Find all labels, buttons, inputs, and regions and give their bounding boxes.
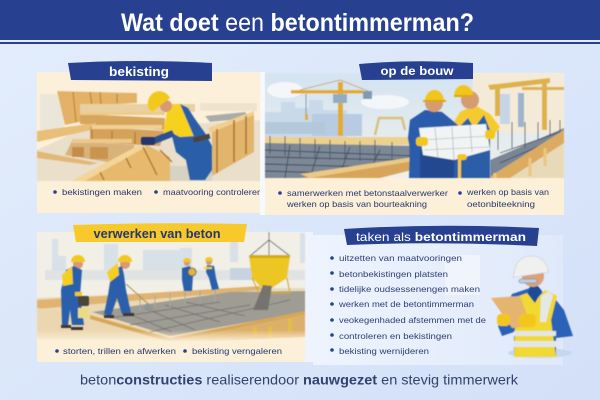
panel: taken als betontimmerman — [313, 226, 573, 365]
title: Wat doet een betontimmerman? — [121, 9, 474, 37]
banner: taken als betontimmerman: taken als betontimmerman — [356, 230, 526, 244]
banner: verwerken van beton: verwerken van beton — [94, 227, 220, 241]
illustration: building site with crane and rebar — [265, 73, 564, 178]
text: beton tasks: bekisting verngaleren — [192, 346, 282, 356]
icon: concrete workers — [61, 255, 219, 330]
list: tasks: betonbekistingen platsten — [339, 269, 448, 279]
illustration: worker building formwork — [37, 72, 260, 181]
list: tasks: werken met de betontimmerman — [338, 299, 474, 309]
list: tasks — [330, 253, 486, 356]
banner: op de bouw — [359, 61, 473, 80]
text: op de bouw tasks: werken op basis van bourteakning — [286, 199, 427, 209]
panel: op de bouw — [265, 61, 564, 215]
gantry crane — [488, 78, 564, 130]
banner: op de bouw: op de bouw — [380, 64, 454, 78]
icon: inspector with clipboard — [491, 256, 573, 358]
text: bekisting tasks: bekistingen maken — [62, 187, 142, 197]
text: op de bouw tasks — [278, 187, 549, 209]
panel: verwerken van beton — [37, 223, 313, 362]
banner: bekisting — [68, 61, 212, 81]
footer tagline: betonconstructies realiserendoor nauwgezet en stevig timmerwerk — [80, 372, 519, 388]
crane — [291, 80, 372, 136]
list: tasks: tidelijke oudsessenengen maken — [339, 284, 480, 294]
icon: concrete bucket — [249, 232, 290, 310]
text: op de bouw tasks: werken op basis van — [466, 187, 549, 197]
text: bekisting tasks — [53, 187, 260, 197]
list: tasks: veokegenhaded afstemmen met de — [339, 315, 486, 325]
text: bekisting tasks: maatvooring controlerer — [163, 187, 260, 197]
text: beton tasks — [55, 346, 282, 356]
icon: two workers reading plan — [408, 85, 500, 178]
banner: bekisting: bekisting — [109, 65, 169, 79]
icon: worker in yellow helmet — [141, 91, 212, 180]
text: op de bouw tasks: oetonbiteekning — [467, 199, 535, 209]
list: tasks: bekisting wernijderen — [339, 346, 429, 356]
illustration: pouring concrete — [37, 232, 305, 342]
banner: taken als betontimmerman — [344, 226, 539, 246]
header band — [0, 0, 600, 44]
text: op de bouw tasks: samerwerken met betonstaalverwerker — [287, 188, 448, 198]
list: tasks: uitzetten van maatvooringen — [339, 253, 462, 263]
panel: bekisting — [37, 61, 265, 215]
list: tasks: controleren en bekistingen — [339, 331, 452, 341]
text: beton tasks: storten, trillen en afwerken — [63, 346, 176, 356]
banner: verwerken van beton — [73, 223, 247, 242]
